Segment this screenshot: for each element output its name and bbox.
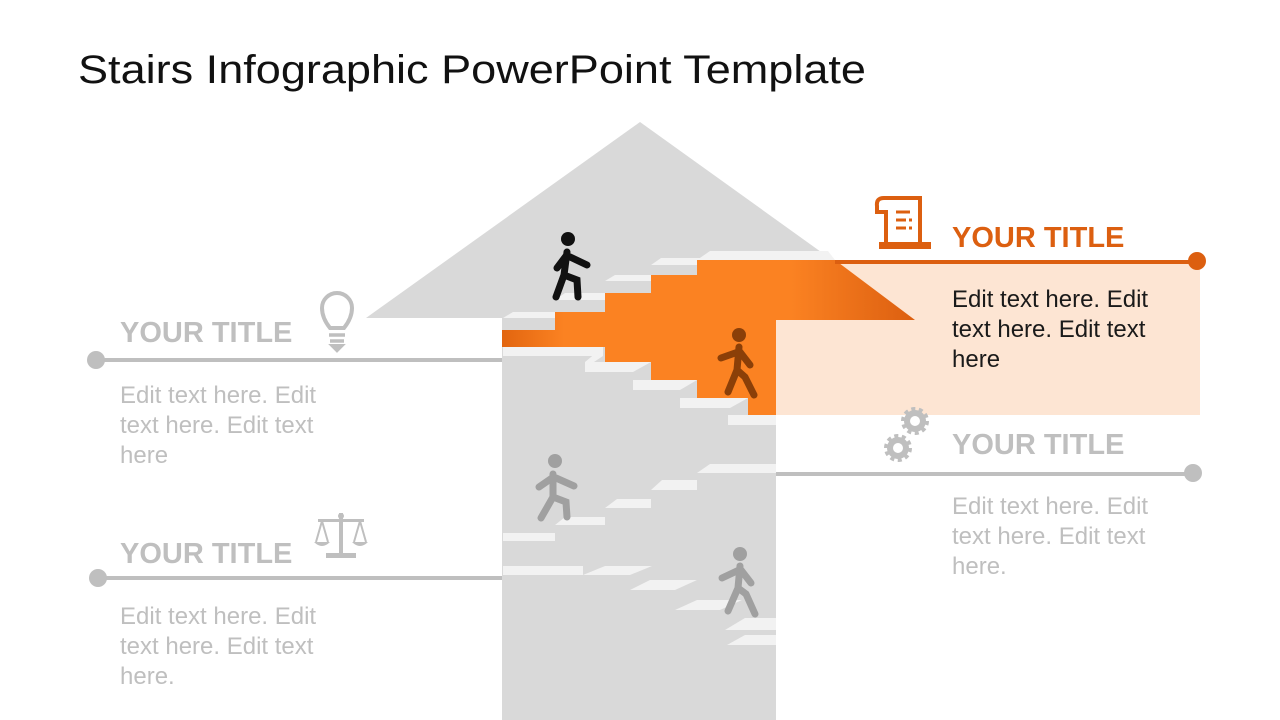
- panel: highlighted step background: [776, 262, 1200, 415]
- icon: gears: [886, 409, 927, 460]
- text block: right bottom: Edit text here. Edit: [952, 493, 1148, 520]
- icon: lightbulb: [322, 293, 352, 350]
- person: orange band brown: [721, 328, 754, 395]
- text block: left top: text here. Edit text: [120, 412, 314, 439]
- title: Stairs Infographic PowerPoint Template: [78, 48, 866, 92]
- person: lower right gray: [722, 547, 755, 614]
- heading: right bottom title: YOUR TITLE: [952, 429, 1124, 461]
- stairs arrow graphic: [366, 122, 915, 720]
- icon: scroll: [877, 198, 931, 249]
- text block: left bottom: Edit text here. Edit: [120, 603, 316, 630]
- icon: scales: [314, 513, 368, 558]
- heading: left top title: YOUR TITLE: [120, 317, 292, 349]
- text block: right bottom: text here. Edit text: [952, 523, 1146, 550]
- person: lower left gray: [539, 454, 574, 518]
- text block: right bottom: here.: [952, 553, 1007, 580]
- panel: highlighted step (orange): [835, 198, 1206, 373]
- heading: orange title: YOUR TITLE: [952, 222, 1124, 254]
- text block: left bottom: here.: [120, 663, 175, 690]
- text block: orange: here: [952, 346, 1000, 373]
- panel: left top: [87, 293, 502, 469]
- lower treads: [503, 347, 776, 645]
- upper gray treads: [503, 251, 835, 318]
- text block: left bottom: text here. Edit text: [120, 633, 314, 660]
- text block: left top: Edit text here. Edit: [120, 382, 316, 409]
- panel: right bottom: [776, 409, 1202, 580]
- text block: left top: here: [120, 442, 168, 469]
- orange highlighted stair band: [502, 260, 915, 415]
- panel: left bottom: [89, 513, 502, 690]
- heading: left bottom title: YOUR TITLE: [120, 538, 292, 570]
- text block: orange: Edit text here. Edit: [952, 286, 1148, 313]
- text block: orange: text here. Edit text: [952, 316, 1146, 343]
- person: top black: [556, 232, 587, 297]
